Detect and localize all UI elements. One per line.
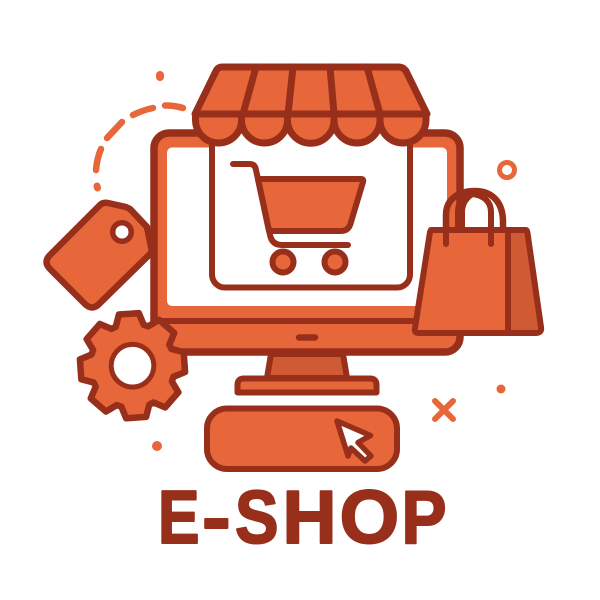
icon: gear bbox=[77, 310, 188, 421]
icon: shopping cart bbox=[233, 164, 363, 272]
monitor chin divider bbox=[154, 318, 460, 324]
icon: price tag bbox=[46, 203, 152, 308]
decorative ring bbox=[500, 162, 514, 178]
monitor neck bbox=[267, 354, 347, 378]
decorative dot right bbox=[496, 384, 506, 394]
cart basket bbox=[258, 179, 363, 231]
awning ribs bbox=[243, 67, 380, 114]
icon: shopping bag bbox=[415, 191, 541, 333]
title bbox=[158, 475, 446, 559]
search button bbox=[207, 408, 397, 469]
monitor screen bbox=[167, 148, 447, 306]
bag front handle bbox=[446, 194, 491, 244]
title: S bbox=[235, 475, 278, 559]
title: P bbox=[402, 475, 446, 559]
dashed arc decoration bbox=[96, 75, 183, 188]
awning roof bbox=[195, 67, 427, 114]
bag body bbox=[508, 230, 541, 333]
awning bbox=[195, 67, 427, 143]
cart wheels bbox=[272, 252, 346, 272]
title: H bbox=[282, 475, 336, 559]
store front frame bbox=[212, 125, 410, 288]
monitor base bbox=[238, 378, 376, 392]
awning scallops bbox=[196, 114, 426, 143]
title: - bbox=[202, 475, 231, 559]
monitor body bbox=[154, 133, 460, 352]
icon: cursor arrow bbox=[337, 421, 371, 461]
title: E bbox=[158, 475, 200, 559]
cart frame bbox=[233, 164, 348, 245]
decorative dot left bbox=[152, 441, 162, 451]
decorative cross bbox=[435, 401, 453, 419]
bag back handle bbox=[446, 191, 503, 232]
power indicator bbox=[299, 334, 315, 341]
title: O bbox=[340, 475, 399, 559]
monitor bbox=[154, 133, 460, 392]
